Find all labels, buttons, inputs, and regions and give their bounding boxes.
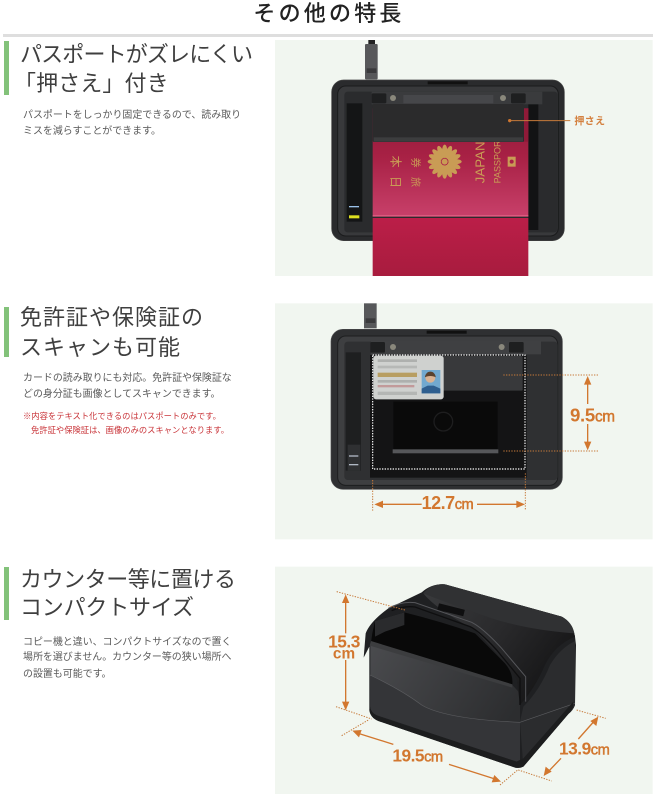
passport: 券	[409, 158, 422, 168]
callout: hold label	[508, 115, 605, 128]
scanner top view	[332, 80, 564, 241]
base band	[369, 702, 573, 768]
red note line 1: ※内容をテキスト化できるのはパスポートのみです。	[23, 411, 221, 421]
dimension: width 12.7cm	[373, 473, 525, 513]
text block: card scan feature	[4, 305, 232, 435]
heading line 2: コンパクトサイズ	[20, 595, 194, 620]
passport: 日	[389, 176, 403, 188]
body text line 2: ミスを減らすことができます。	[23, 126, 161, 137]
icon: USB cable	[365, 40, 378, 79]
dimension: height 15.3cm: 15.3	[328, 632, 361, 652]
green accent bar	[4, 567, 9, 620]
title: その他の特長	[253, 1, 405, 26]
silhouette	[364, 584, 576, 768]
green accent bar	[4, 41, 9, 95]
dimension: height 9.5cm	[503, 375, 615, 451]
dimension: height 15.3cm: cm	[333, 646, 355, 663]
front panel	[370, 644, 520, 762]
hinges and screws	[372, 93, 526, 103]
dimension: depth 13.9cm: 13.9cm	[559, 739, 610, 759]
text block: compact size feature	[4, 567, 236, 680]
red note line 2: 免許証や保険証は、画像のみのスキャンとなります。	[31, 425, 229, 435]
panel: card scan photo	[275, 303, 652, 540]
callout: hold label: 押さえ	[574, 115, 605, 128]
body text line 2: 場所を選びません。カウンター等の狭い場所へ	[23, 652, 231, 663]
heading: passport hold: パスポートがズレにくい	[20, 42, 252, 67]
hood top	[423, 584, 575, 705]
passport: 旅	[409, 177, 422, 187]
green accent bar	[4, 307, 9, 357]
body text line 1: コピー機と違い、コンパクトサイズなので置く	[23, 637, 231, 648]
hood opening	[371, 612, 512, 684]
body text line 1: カードの読み取りにも対応。免許証や保険証な	[23, 373, 232, 384]
dimension: height 9.5cm: 9.5cm	[570, 404, 615, 425]
hold bar	[373, 104, 528, 142]
panel: compact size photo	[275, 566, 652, 794]
dimension: height 15.3cm	[328, 592, 405, 719]
dimension: depth 13.9cm	[518, 710, 610, 781]
passport: PASSPORT	[492, 135, 502, 183]
scanner top view	[331, 329, 562, 489]
heading: licence and insurance card: 免許証や保険証の	[20, 305, 204, 330]
scanner perspective view	[364, 584, 576, 768]
dimension: width 12.7cm: 12.7cm	[422, 493, 474, 513]
dimension: width 19.5cm	[342, 720, 518, 785]
body text line 1: パスポートをしっかり固定できるので、読み取り	[23, 110, 241, 121]
licence card	[373, 356, 444, 399]
passport vertical Japanese text: 本	[389, 156, 403, 168]
heading line 2: 「押さえ」付き	[14, 71, 169, 96]
passport: JAPAN	[472, 141, 487, 183]
heading line 2: スキャンも可能	[20, 335, 181, 360]
heading: fits on counters: カウンター等に置ける	[20, 567, 236, 592]
scan area dotted frame	[373, 355, 525, 469]
body text line 3: の設置も可能です。	[23, 669, 111, 680]
body text line 2: どの身分証も画像としてスキャンできます。	[23, 389, 220, 400]
panel: passport hold photo	[275, 40, 652, 276]
dimension: width 19.5cm: 19.5cm	[392, 745, 443, 765]
passport	[373, 108, 528, 276]
hood rim lines	[388, 602, 526, 702]
right side lower	[520, 641, 575, 767]
icon: USB cable	[364, 303, 377, 328]
emblem: chrysanthemum	[428, 145, 462, 179]
text block: passport hold feature	[4, 41, 252, 137]
